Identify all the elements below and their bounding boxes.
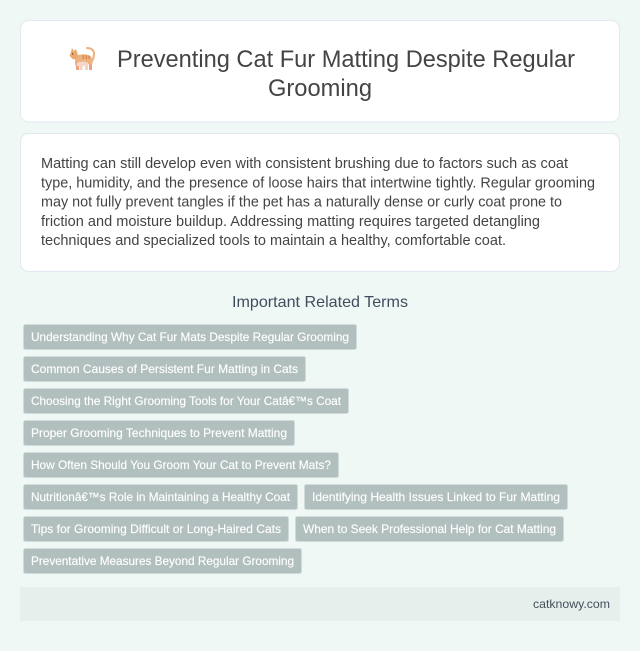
tag 6: Nutritionâ€™s Role in Maintaining a Healthy Coat — [31, 490, 291, 504]
panel: description card — [20, 134, 620, 272]
footer — [20, 587, 620, 621]
icon: cat — [70, 48, 94, 70]
tag 3: Choosing the Right Grooming Tools for Your Catâ€™s Coat — [31, 394, 342, 408]
tag 4 — [24, 420, 294, 446]
title — [117, 46, 575, 102]
tag 10 — [24, 548, 302, 574]
tag 8: Tips for Grooming Difficult or Long-Haired Cats — [31, 522, 281, 536]
tag 5: How Often Should You Groom Your Cat to Prevent Mats? — [31, 458, 331, 472]
tag 8 — [24, 516, 288, 542]
tag 7: Identifying Health Issues Linked to Fur Matting — [312, 490, 560, 504]
tag 7 — [304, 484, 568, 510]
title: Preventing Cat Fur Matting Despite Regular — [117, 46, 575, 73]
text block: description: type, humidity, and the presence of loose hairs that intertwine tightly. Regular grooming — [41, 174, 595, 192]
tag 4: Proper Grooming Techniques to Prevent Matting — [31, 426, 287, 440]
tag 10: Preventative Measures Beyond Regular Grooming — [31, 554, 294, 568]
text block: description: friction and moisture buildup. Addressing matting requires targeted detangling — [41, 213, 540, 230]
tag 9: When to Seek Professional Help for Cat Matting — [303, 522, 556, 536]
text block: description: techniques and specialized tools to maintain a healthy, comfortable coat. — [41, 232, 506, 249]
text block: description: may not fully prevent tangles if the pet has a naturally dense or curly coat prone to — [41, 194, 562, 210]
heading: related terms: Important Related Terms — [232, 294, 408, 311]
tag 1: Understanding Why Cat Fur Mats Despite Regular Grooming — [31, 330, 349, 344]
text block: description: Matting can still develop even with consistent brushing due to factors such as coat — [41, 155, 569, 172]
panel: title card — [20, 20, 620, 122]
tag 2: Common Causes of Persistent Fur Matting in Cats — [31, 362, 298, 376]
title: Grooming — [268, 75, 372, 102]
tag 9 — [296, 516, 564, 542]
tag 6 — [24, 484, 298, 510]
tag 5 — [24, 452, 338, 478]
footer: catknowy.com — [533, 597, 610, 611]
panel: term tags — [24, 324, 568, 574]
tag 1 — [24, 324, 356, 350]
tag 2 — [24, 356, 306, 382]
text block: description — [41, 155, 595, 249]
tag 3 — [24, 388, 348, 414]
